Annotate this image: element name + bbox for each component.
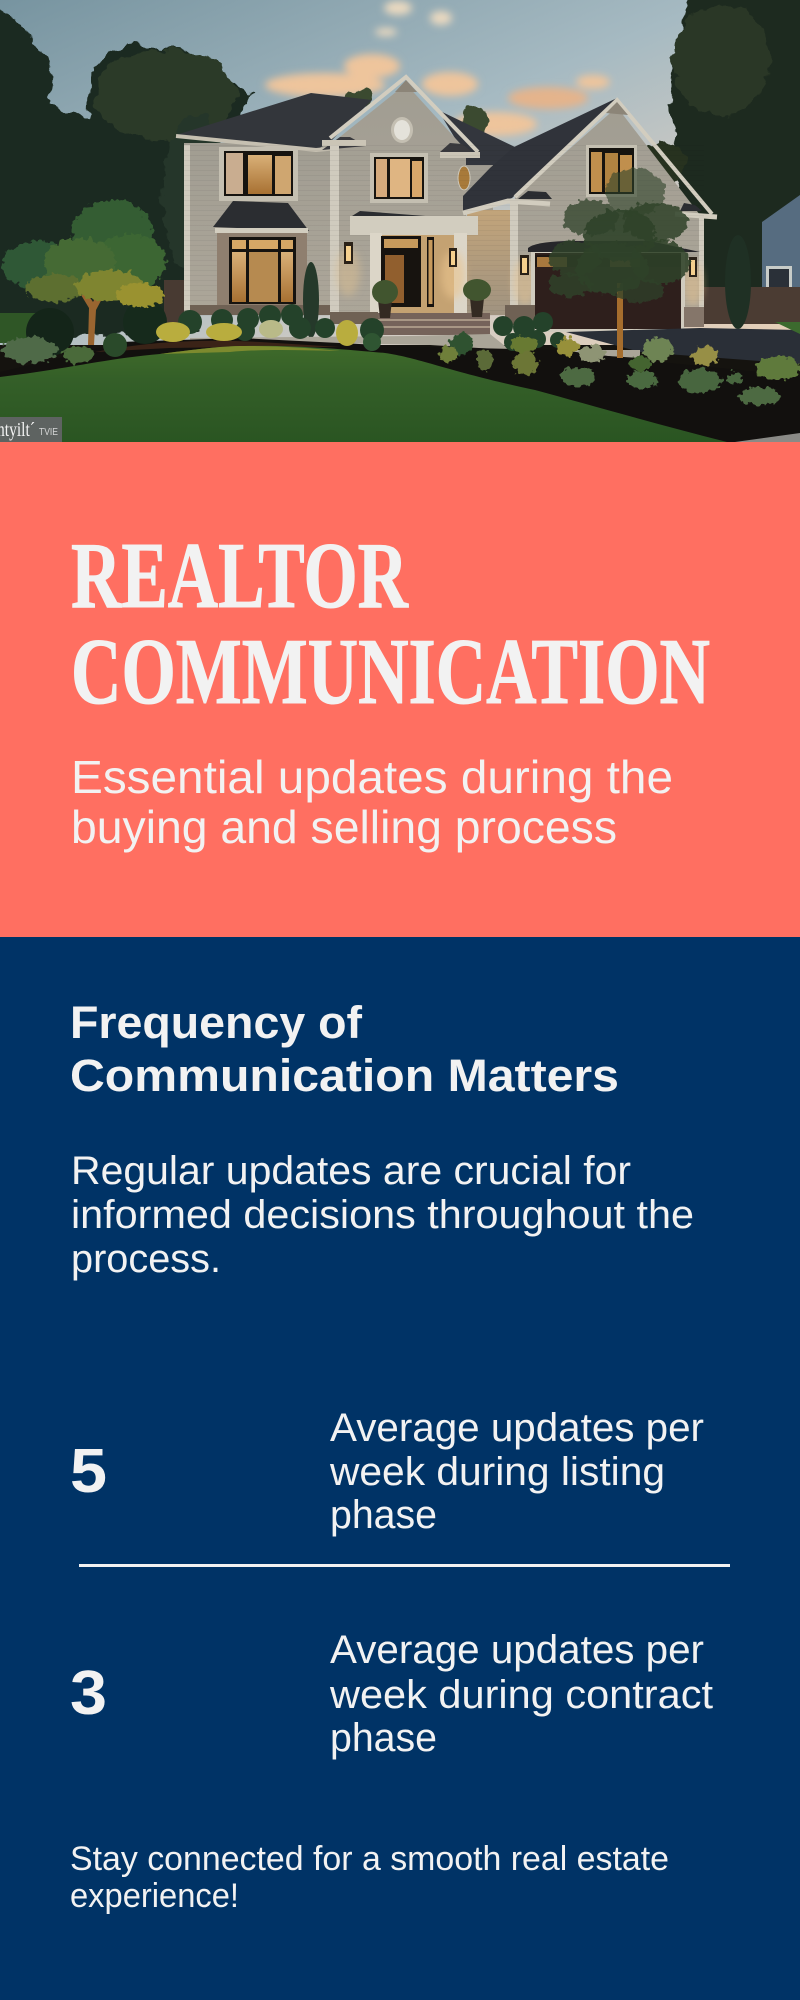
title — [71, 524, 710, 724]
fence — [164, 280, 800, 328]
closing note: experience! — [70, 1877, 239, 1915]
base shrubs — [26, 300, 566, 357]
subtitle: buying and selling process — [71, 801, 617, 853]
neighbouring house — [762, 195, 800, 290]
stat label contract: week during contract — [329, 1673, 713, 1717]
house — [176, 77, 717, 338]
back roof — [442, 112, 515, 166]
cypress — [725, 287, 751, 329]
potted plants — [372, 279, 491, 318]
title: REALTOR — [71, 524, 409, 628]
bay stone surround — [217, 233, 307, 305]
watermark badge — [0, 417, 62, 442]
panel: coral title — [0, 442, 800, 937]
stat label listing: week during listing — [329, 1450, 665, 1494]
section heading: Frequency of — [70, 997, 363, 1048]
upper centre window — [370, 153, 428, 203]
stat label contract: Average updates per — [330, 1628, 704, 1672]
sky with sunset clouds — [0, 0, 800, 345]
entry steps — [330, 312, 490, 335]
stat number 3: 3 — [70, 1659, 107, 1728]
left side lawn patch — [0, 313, 36, 343]
stat number 5: 5 — [70, 1437, 107, 1506]
driveway — [566, 328, 800, 364]
front young tree — [548, 168, 690, 358]
section body text: process. — [71, 1237, 221, 1281]
spiral topiary — [303, 262, 319, 338]
hero photo: house at dusk — [0, 0, 800, 442]
closing note: Stay connected for a smooth real estate — [70, 1840, 669, 1878]
panel: navy frequency section — [0, 937, 800, 2000]
section heading: Communication Matters — [70, 1050, 619, 1101]
subtitle: Essential updates during the — [71, 751, 673, 803]
subtitle — [71, 751, 673, 853]
oval vent — [391, 117, 413, 143]
left hip roof — [176, 93, 372, 150]
centre gable wall — [336, 84, 466, 322]
bay window — [229, 237, 296, 304]
section body text: informed decisions throughout the — [71, 1193, 694, 1237]
watermark badge: TVIE — [39, 427, 58, 438]
stat label contract: phase — [330, 1716, 437, 1760]
upper right window — [586, 145, 637, 197]
stat: listing phase — [70, 1406, 704, 1537]
closing note — [70, 1840, 669, 1915]
right gable wall — [515, 113, 699, 307]
eaves and caps — [322, 137, 717, 217]
section body text: Regular updates are crucial for — [71, 1149, 631, 1193]
stat label listing: Average updates per — [330, 1406, 704, 1450]
garage — [528, 241, 704, 332]
right roof — [463, 98, 617, 212]
walkway — [190, 334, 640, 358]
lit lawn edge — [160, 346, 340, 354]
stat label listing — [329, 1406, 704, 1537]
porch — [350, 211, 478, 321]
kerb — [735, 433, 800, 442]
bay roof — [213, 201, 309, 231]
wall lanterns — [336, 242, 703, 306]
left flowering tree — [2, 200, 166, 364]
left wing wall — [184, 143, 334, 313]
stat label listing: phase — [330, 1493, 437, 1537]
right lawn strip — [775, 322, 800, 334]
stat label contract — [329, 1628, 713, 1760]
stat: contract phase — [70, 1628, 713, 1760]
bed plants right — [438, 333, 800, 405]
upper left window — [219, 147, 298, 201]
section heading — [70, 997, 619, 1101]
lawn — [0, 346, 727, 442]
background trees — [0, 0, 800, 340]
section body text — [71, 1149, 694, 1281]
mulch bed — [126, 338, 612, 356]
